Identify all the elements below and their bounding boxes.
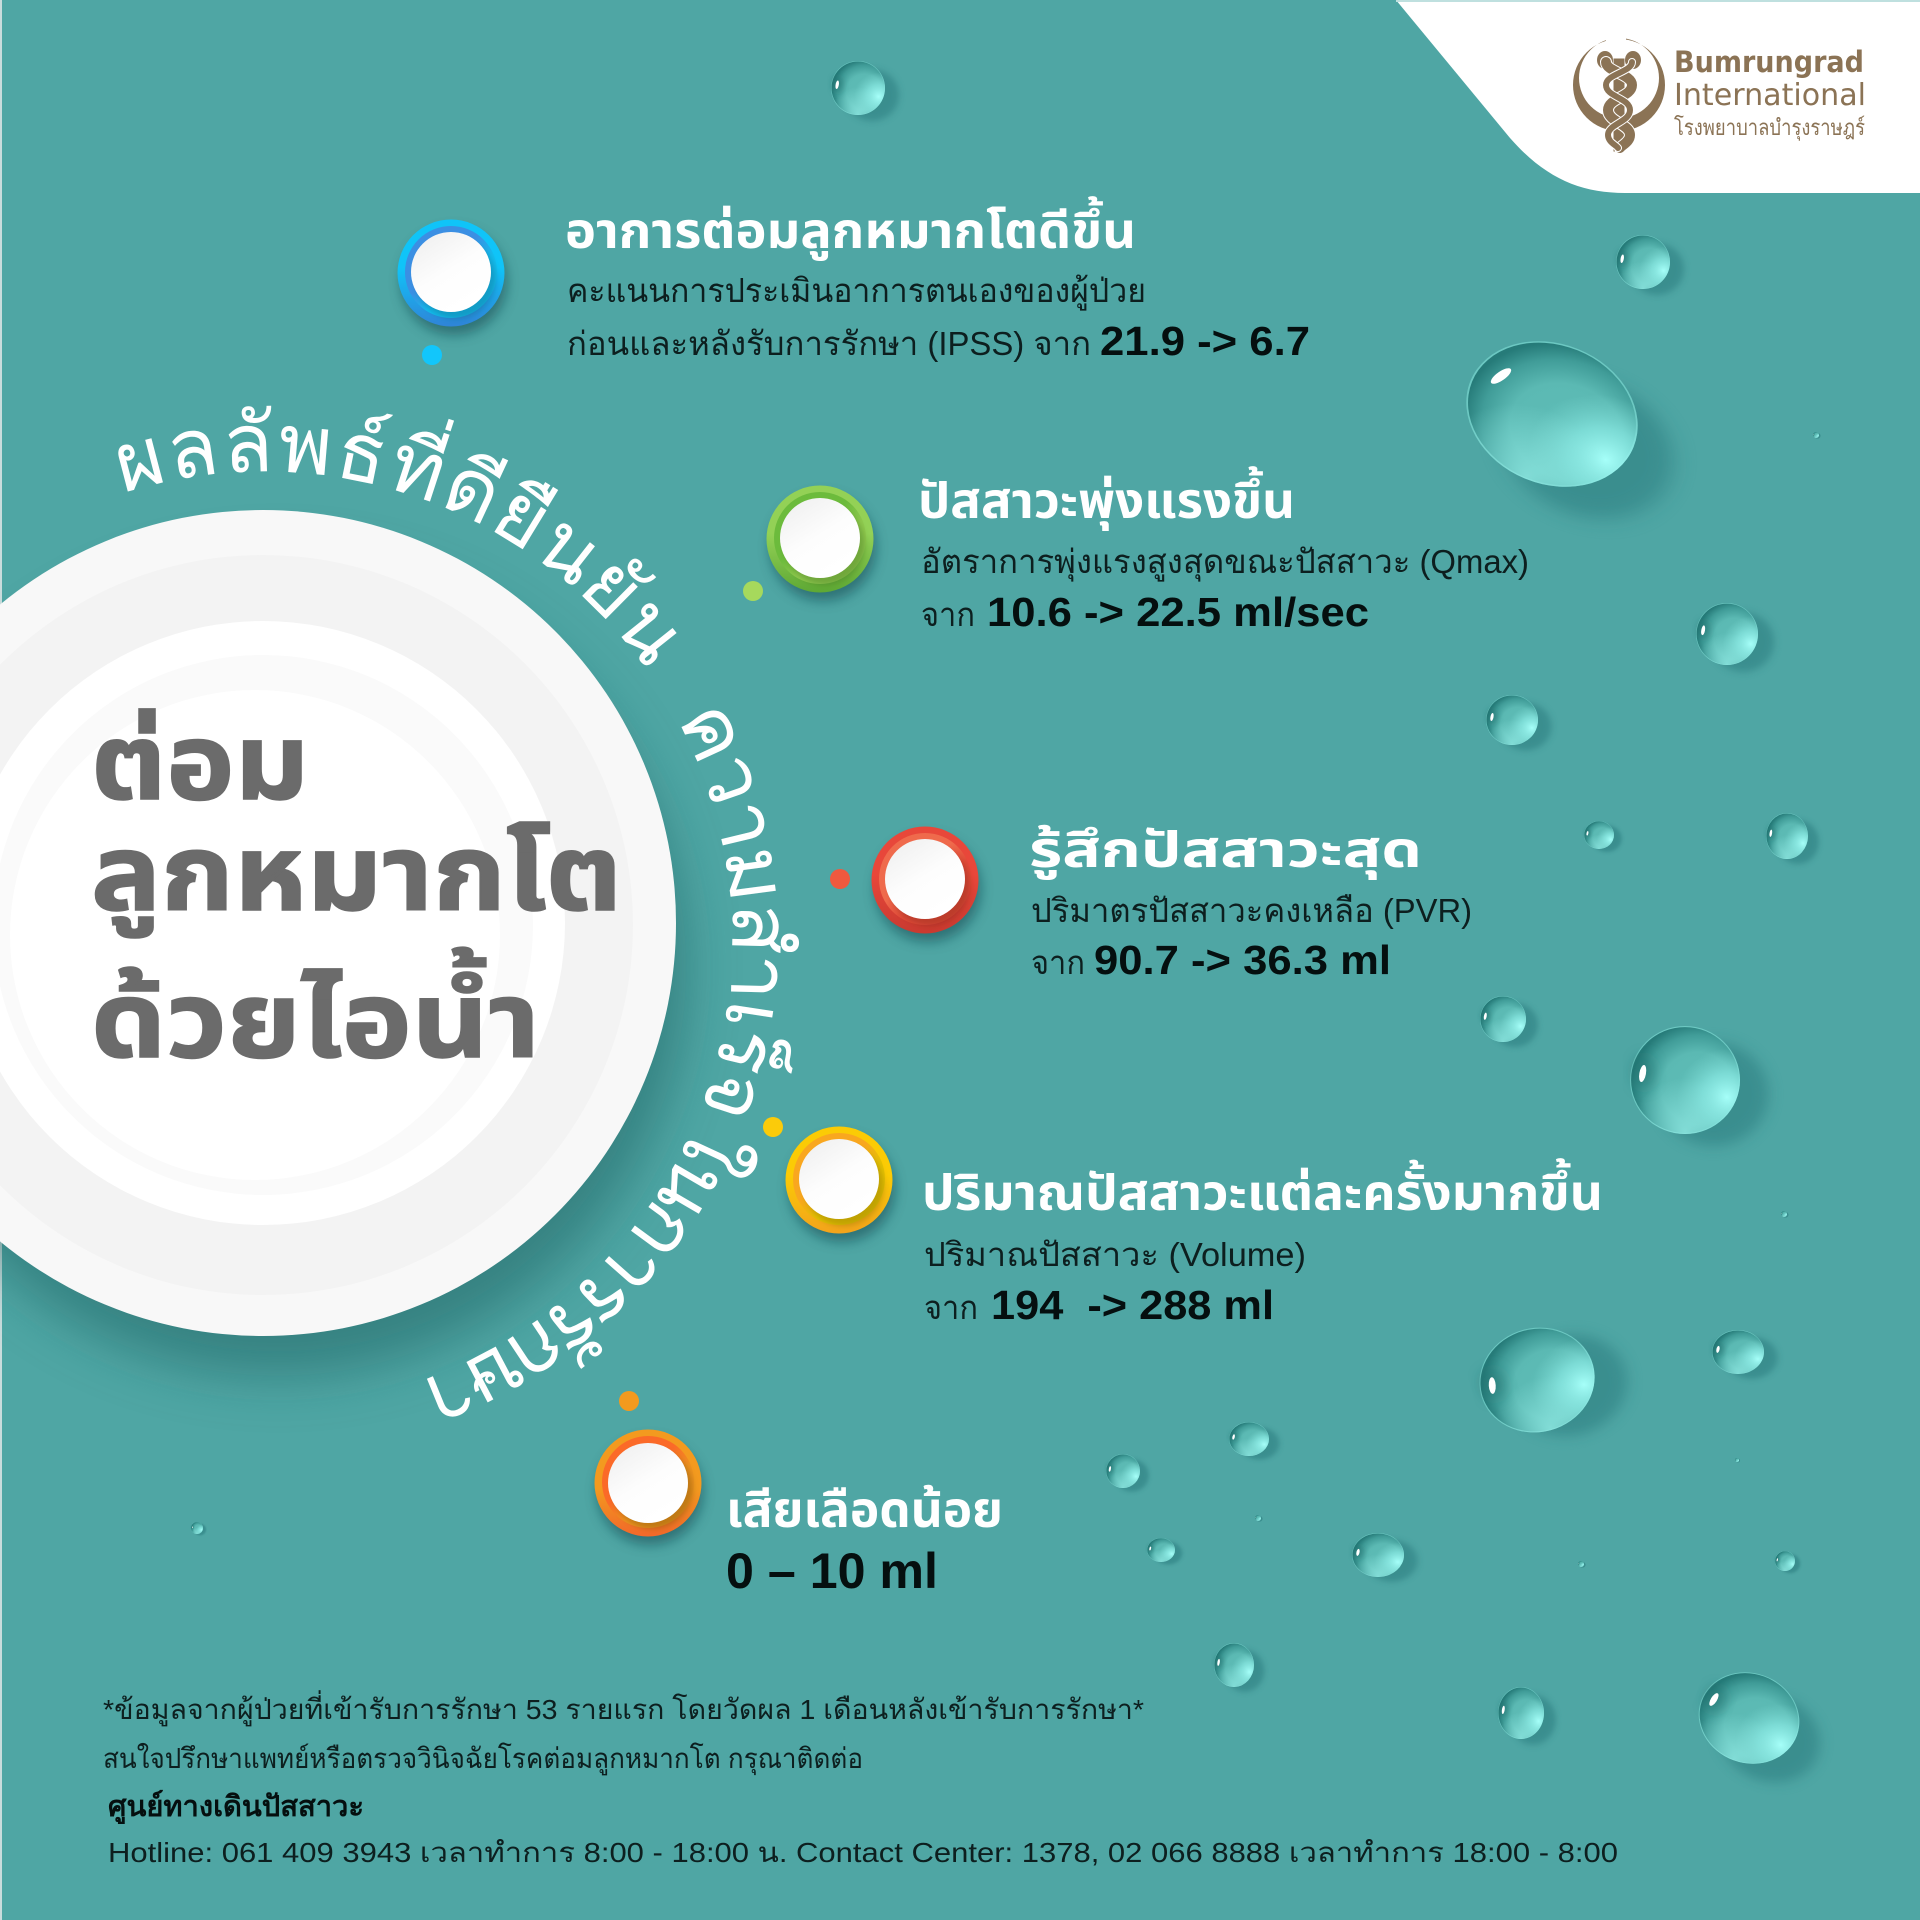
block: volume: ปริมาณปัสสาวะแต่ละครั้งมากขึ้น [922, 1157, 1603, 1233]
icon: water drop [1712, 1330, 1778, 1379]
icon: water drop [1480, 996, 1538, 1047]
water drops [191, 61, 1837, 1796]
dot [763, 1117, 783, 1137]
block: flow: อัตราการพุ่งแรงสูงสุดขณะปัสสาวะ (Qmax) [921, 543, 1529, 582]
block: flow: จาก [921, 596, 975, 633]
panel: central plate [0, 510, 686, 1376]
panel: logo tab [1396, 0, 1920, 193]
footer text [103, 1690, 1618, 1868]
icon: water drop [1775, 1551, 1800, 1573]
icon: water drop [1735, 1458, 1740, 1462]
block: volume [922, 1157, 1603, 1328]
badge: red [830, 826, 981, 942]
block: volume: ปริมาณปัสสาวะ (Volume) [924, 1236, 1306, 1273]
icon: water drop [1584, 821, 1622, 852]
block: volume: 194 -> 288 ml [991, 1282, 1274, 1328]
dot [743, 581, 763, 601]
block: volume: จาก [924, 1289, 978, 1326]
icon: water drop [1214, 1643, 1264, 1692]
logo: Bumrungrad International [1573, 35, 1866, 152]
dot [422, 345, 442, 365]
icon: water drop [1766, 813, 1819, 864]
icon: water drop [1813, 432, 1821, 439]
logo thai name: โรงพยาบาลบำรุงราษฎร์ [1674, 115, 1865, 141]
icon: water drop [1696, 603, 1774, 672]
curved heading: ในการรักษา [427, 1140, 758, 1417]
icon: water drop [1147, 1538, 1182, 1565]
block: flow [918, 465, 1529, 635]
block: residual: รู้สึกปัสสาวะสุด [1029, 814, 1422, 890]
icon: water drop [191, 1522, 206, 1535]
block: flow: 10.6 -> 22.5 ml/sec [987, 589, 1369, 635]
icon: water drop [831, 61, 899, 121]
block: symptoms: คะแนนการประเมินอาการตนเองของผู้ป่วย [567, 272, 1146, 311]
icon: water drop [1630, 1026, 1769, 1146]
block: residual: ปริมาตรปัสสาวะคงเหลือ (PVR) [1031, 892, 1472, 929]
badge: blue [398, 220, 507, 365]
block: blood loss: 0 – 10 ml [726, 1543, 938, 1599]
icon: water drop [1616, 235, 1684, 295]
footer text: สนใจปรึกษาแพทย์หรือตรวจวินิจฉัยโรคต่อมลูกหมากโต กรุณาติดต่อ [103, 1742, 863, 1776]
title: ด้วยไอน้ำ [91, 945, 540, 1105]
title [91, 687, 622, 1105]
footer text: Hotline: 061 409 3943 เวลาทำการ 8:00 - 18:00 น. Contact Center: 1378, 02 066 8888 เวลาทำการ 18:00 - 8:00 [108, 1837, 1618, 1868]
icon: water drop [1468, 1307, 1639, 1456]
badge: yellow [763, 1117, 895, 1242]
icon: water drop [1255, 1515, 1263, 1522]
footer text: ศูนย์ทางเดินปัสสาวะ [108, 1789, 364, 1824]
block: residual: จาก [1031, 944, 1085, 981]
block: blood loss [726, 1474, 1003, 1599]
icon: water drop [1498, 1687, 1556, 1745]
curved heading: ความสำเร็จ [682, 710, 800, 1114]
block: symptoms: อาการต่อมลูกหมากโตดีขึ้น [565, 195, 1136, 271]
icon: water drop [1682, 1658, 1837, 1796]
badge: orange [594, 1391, 703, 1545]
logo name: Bumrungrad [1674, 45, 1864, 79]
badge: green [743, 486, 876, 601]
icon: caduceus emblem [1573, 35, 1665, 152]
curved heading: ผลลัพธ์ที่ดียืนยัน [118, 406, 676, 666]
block: symptoms: 21.9 -> 6.7 [1100, 318, 1310, 364]
block: symptoms: ก่อนและหลังรับการรักษา (IPSS) จาก [567, 325, 1091, 362]
icon: large water drop [1438, 316, 1702, 543]
icon: water drop [1352, 1533, 1418, 1582]
block: flow: ปัสสาวะพุ่งแรงขึ้น [918, 465, 1295, 541]
curved heading [118, 406, 800, 1417]
logo subname: International [1674, 78, 1866, 113]
icon: water drop [1578, 1561, 1586, 1568]
dot [619, 1391, 639, 1411]
title: ลูกหมากโต [91, 798, 622, 958]
icon: water drop [1486, 695, 1552, 750]
icon: water drop [1229, 1422, 1279, 1460]
icon: water drop [1781, 1211, 1789, 1218]
dot [830, 869, 850, 889]
block: residual [1029, 814, 1472, 983]
footer text: *ข้อมูลจากผู้ป่วยที่เข้ารับการรักษา 53 รายแรก โดยวัดผล 1 เดือนหลังเข้ารับการรักษา* [103, 1690, 1144, 1727]
title: ต่อม [91, 687, 309, 847]
block: blood loss: เสียเลือดน้อย [726, 1474, 1003, 1550]
icon: water drop [1106, 1454, 1149, 1492]
block: symptoms [565, 195, 1310, 364]
block: residual: 90.7 -> 36.3 ml [1094, 937, 1391, 983]
